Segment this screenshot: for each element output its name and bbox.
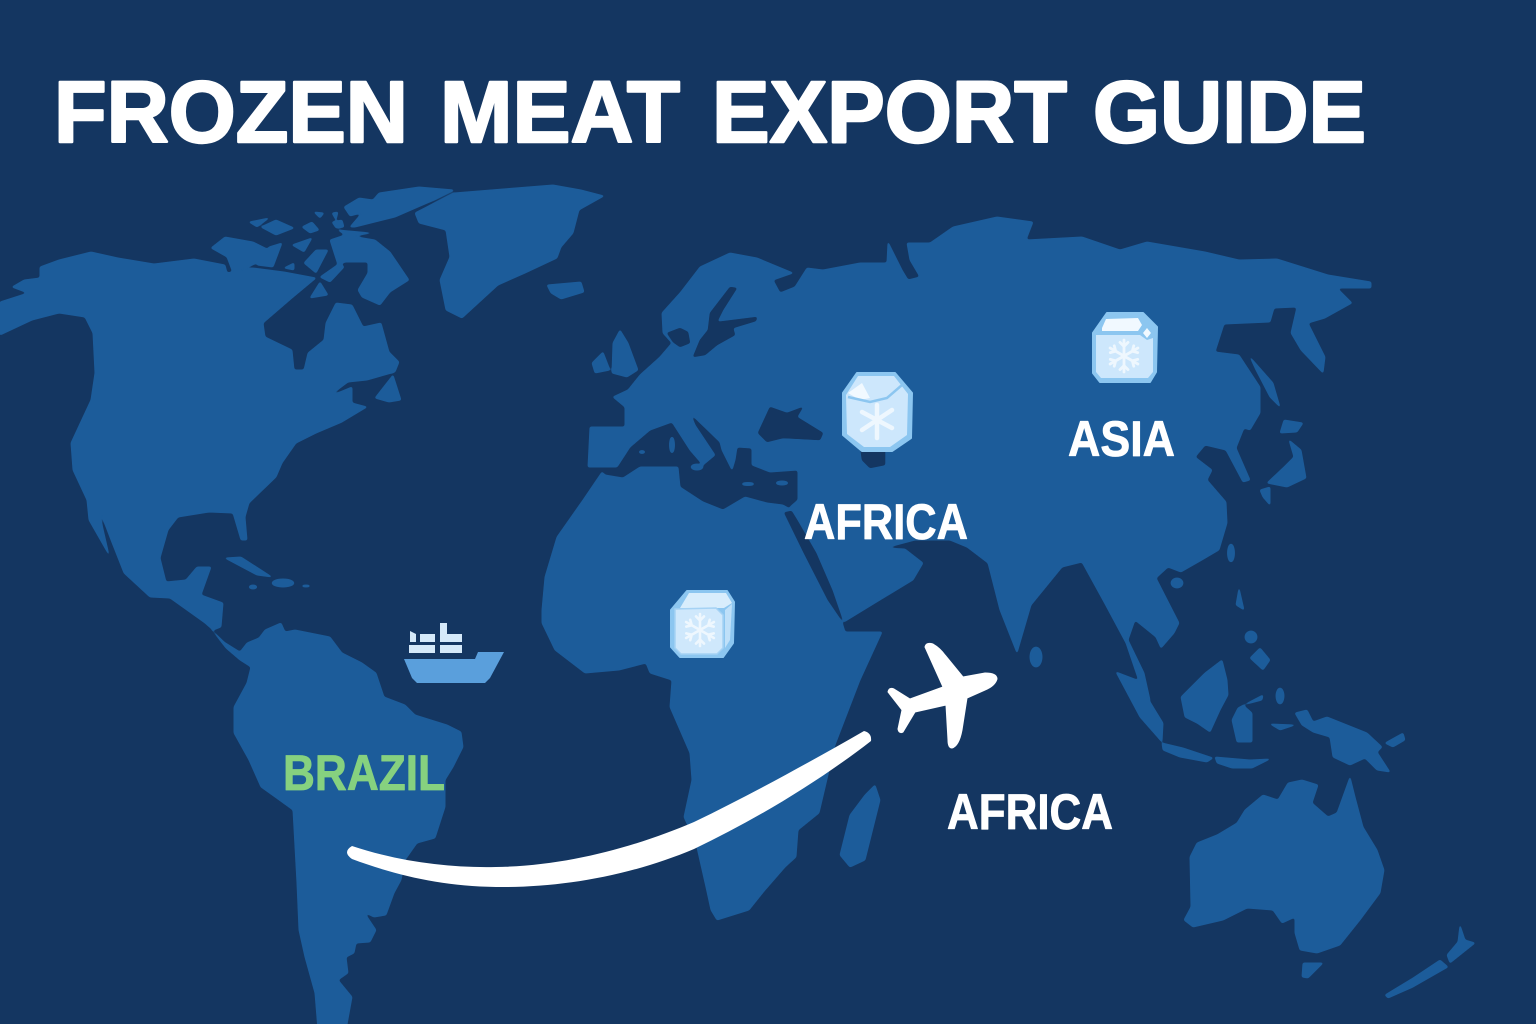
icon: cargo ship xyxy=(404,623,504,683)
label: Asia: ASIA xyxy=(1068,411,1175,467)
arrow: export route from Brazil xyxy=(347,731,871,887)
icon: airplane xyxy=(888,643,997,748)
label: Brazil: BRAZIL xyxy=(283,745,445,801)
title xyxy=(54,64,1366,161)
snowflake xyxy=(686,614,714,646)
label: Africa in Indian Ocean: AFRICA xyxy=(947,784,1113,840)
icon: ice cube Africa (Central Africa) xyxy=(671,591,734,657)
snowflake xyxy=(1110,340,1138,372)
world map xyxy=(0,185,1475,1024)
map: inland seas xyxy=(667,287,885,468)
snowflake xyxy=(862,405,892,438)
map: Australia and New Zealand xyxy=(1184,777,1475,998)
map: Southeast Asia xyxy=(1116,588,1405,772)
icon: ice cube Asia xyxy=(1093,313,1157,382)
title: EXPORT xyxy=(712,64,1067,161)
label: Africa on Middle East: AFRICA xyxy=(804,494,968,550)
title: MEAT xyxy=(440,64,680,161)
map: Greenland and Iceland xyxy=(415,185,604,318)
map: Eurasia xyxy=(588,217,1371,700)
title: GUIDE xyxy=(1093,64,1366,161)
title: FROZEN xyxy=(54,64,408,161)
map: North America xyxy=(0,187,454,630)
map: South America xyxy=(212,623,463,1024)
map: Africa xyxy=(542,467,882,920)
icon: ice cube Middle East xyxy=(843,373,912,451)
